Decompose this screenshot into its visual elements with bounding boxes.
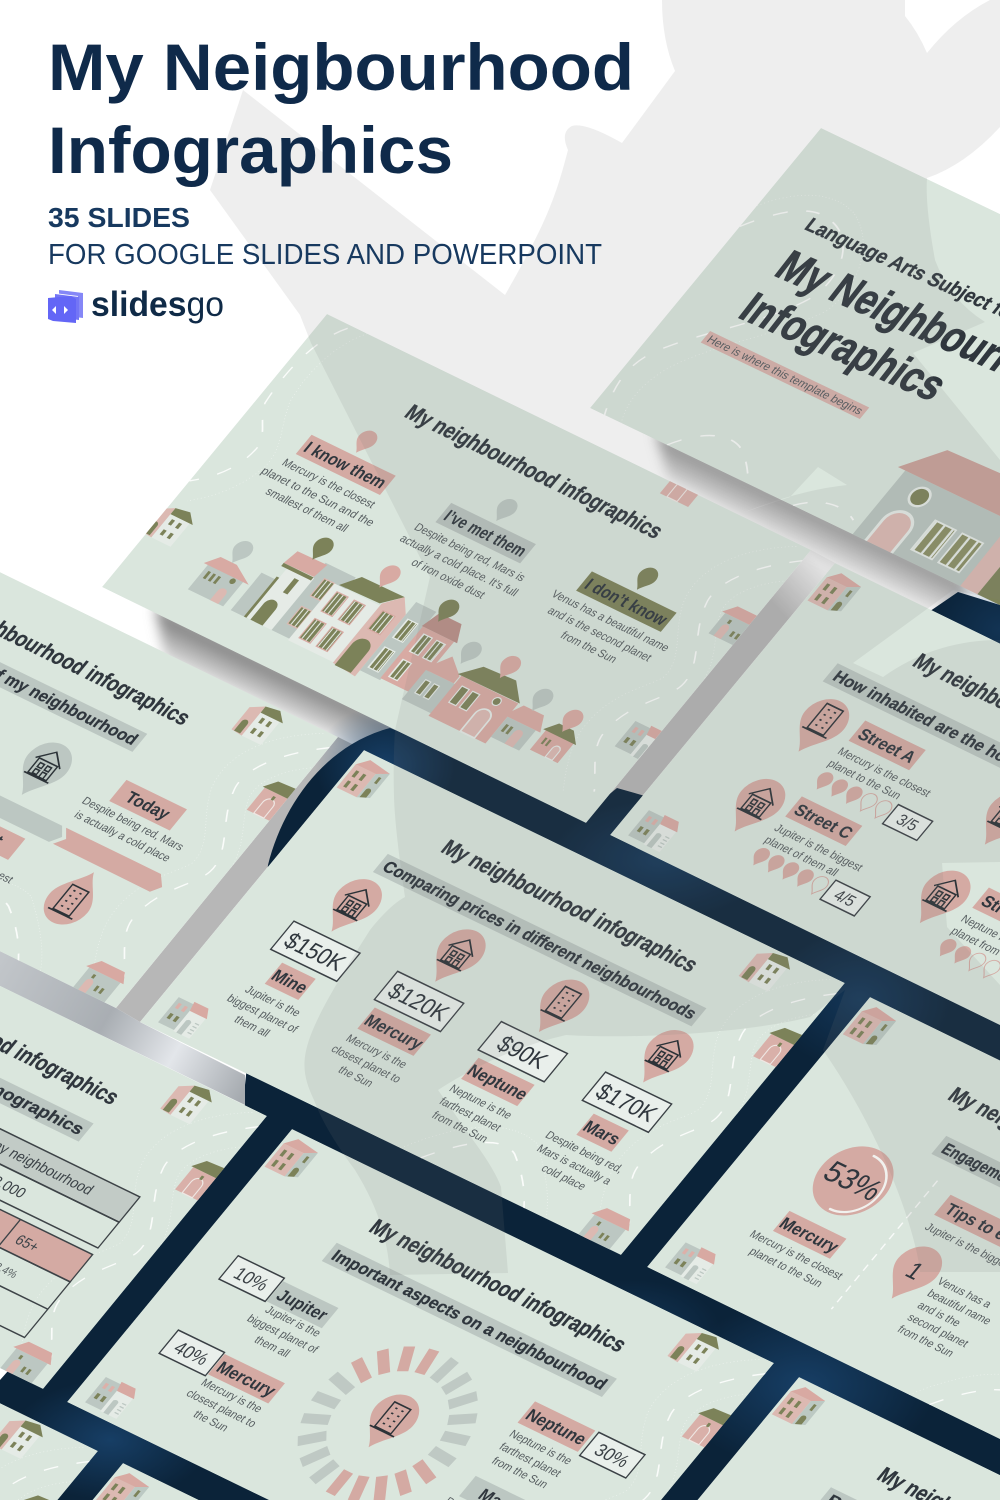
- column: I know them: Mercury is the closest: [279, 457, 378, 511]
- column: I've met them: actually a cold place. It’s full: [397, 533, 520, 599]
- label: Mercury: [736, 1204, 866, 1295]
- item: Mercury: the Sun: [335, 1064, 375, 1090]
- column: I don't know: and is the second planet: [545, 605, 655, 665]
- item: step 1: beautiful name: [924, 1288, 994, 1327]
- slide: bottom right: [576, 1377, 1000, 1500]
- item: Street A: planet to the Sun: [825, 758, 903, 802]
- item: Mine: Mine: [267, 966, 312, 997]
- item: Neptune: farthest planet: [496, 1441, 564, 1480]
- item: Neptune: from the Sun: [489, 1455, 550, 1491]
- subtitle bar: Important aspects on a neighbourhood: [327, 1247, 611, 1394]
- item: step 1: from the Sun: [895, 1324, 956, 1360]
- slide: I know them: [97, 291, 838, 828]
- item: Jupiter: 10%: [229, 1263, 274, 1295]
- item: Mine: biggest planet of: [224, 993, 301, 1036]
- stat: 53%: [796, 1135, 910, 1227]
- subtitle bar: [0, 1078, 94, 1142]
- column: I've met them: I’ve met them: [440, 507, 531, 561]
- item: Mine: [226, 879, 382, 1037]
- gradient band under left slide: [0, 951, 245, 1105]
- slide: comparing prices: [138, 750, 853, 1262]
- column: I don't know: [548, 568, 676, 663]
- item: Jupiter: Jupiter: [272, 1286, 332, 1325]
- item: Neptune: [484, 1401, 645, 1500]
- item: Mars: Mars is actually a: [534, 1143, 614, 1188]
- icon: stacked slides: [48, 290, 83, 323]
- road left: [190, 328, 367, 501]
- item: Today: Today: [121, 788, 175, 824]
- item: Neptune: Neptune is the: [446, 1083, 514, 1122]
- item: step 1: [853, 1239, 1000, 1363]
- item: Mercury: [130, 1330, 289, 1443]
- item: Mercury: the Sun: [190, 1409, 231, 1434]
- column: I've met them: of iron oxide dust: [408, 557, 488, 602]
- item: Mars: $170K: [590, 1078, 664, 1127]
- item: Jupiter: them all: [251, 1334, 292, 1360]
- item: Mars: [442, 1473, 542, 1500]
- item: Jupiter: Jupiter is the: [262, 1304, 323, 1340]
- column: I know them: [259, 430, 396, 532]
- title: My neighbourhood infographics: [400, 400, 669, 543]
- subheading: 35 SLIDES: [48, 202, 190, 233]
- item: Neptune: Neptune is the: [506, 1428, 574, 1467]
- item: step 1: and is the: [914, 1300, 963, 1329]
- item: Neptune: [432, 980, 590, 1143]
- slide: bottom left: [0, 1215, 107, 1500]
- column: I've met them: [400, 499, 536, 599]
- item: Mercury: closest planet to: [183, 1388, 259, 1430]
- item: Street C: planet of them all: [761, 835, 841, 879]
- item: Street C: 4/5: [830, 887, 860, 910]
- item: Mars: [536, 1030, 694, 1190]
- item: past label: [0, 826, 26, 884]
- subtitle bar: [822, 663, 1000, 768]
- item: Jupiter: biggest planet of: [244, 1313, 321, 1356]
- item: Mine: them all: [231, 1014, 272, 1040]
- item: Street A: 3/5: [892, 812, 922, 835]
- timeline arrows: [0, 796, 162, 892]
- street of houses: [188, 538, 584, 763]
- item: Street B: [984, 796, 1000, 844]
- heading: [48, 30, 634, 187]
- item: past pin: [22, 742, 72, 794]
- item: Today: is actually a cold place: [72, 809, 173, 865]
- column: I know them: I know them: [300, 438, 391, 492]
- item: Street A: Street A: [854, 725, 920, 767]
- slide: engagement: [647, 997, 1000, 1439]
- cover subtitle bar: Here is where this template begins: [704, 334, 865, 418]
- small houses: [140, 291, 838, 775]
- item: Neptune: $90K: [491, 1031, 554, 1074]
- item: Street C: Street C: [790, 801, 857, 843]
- item: step 1: 1: [899, 1258, 929, 1285]
- wordmark: slidesgo: [91, 285, 224, 324]
- stat: 53%: 53%: [816, 1156, 889, 1208]
- column: I don't know: Venus has a beautiful name: [548, 588, 672, 654]
- item: step 1: second planet: [905, 1312, 971, 1350]
- heading: My Neigbourhood: [48, 30, 634, 104]
- navy backdrop: [0, 570, 1000, 1500]
- title: My neighbourhood infographics: [436, 835, 704, 977]
- data table: 65+: [11, 1232, 42, 1256]
- item: Mine: Jupiter is the: [242, 984, 303, 1019]
- label: Mercury: Mercury is the closest: [747, 1229, 846, 1283]
- item: Neptune: Neptune: [463, 1061, 532, 1104]
- column: I don't know: I don’t know: [580, 575, 672, 629]
- item: Neptune: farthest planet: [436, 1096, 504, 1134]
- slide: how inhabited: [610, 563, 1000, 1076]
- item: Neptune: Neptune: [521, 1406, 591, 1449]
- item: Mercury: [332, 929, 486, 1087]
- item: Mars: cold place: [538, 1163, 588, 1193]
- gray band left of comparing slide: [116, 737, 364, 1022]
- logo: slidesgo: [48, 285, 224, 324]
- gray band between slides: [586, 550, 835, 835]
- item: Today: Despite being red, Mars: [79, 795, 186, 854]
- item: Street A: [798, 699, 934, 842]
- item: Today: [74, 780, 187, 862]
- item: Mercury: Mercury is the: [198, 1377, 265, 1415]
- heading: Infographics: [48, 113, 453, 187]
- shadow under cover slide: [655, 430, 965, 625]
- subtitle bar: [0, 662, 147, 752]
- item: Mercury: closest planet to: [328, 1043, 403, 1086]
- column: I don't know: from the Sun: [558, 630, 619, 666]
- item: Street C: [734, 778, 872, 917]
- subtitle bar: [816, 1487, 1000, 1500]
- item: Mercury: Mercury: [360, 1011, 428, 1053]
- item: Mercury: Mercury is the: [343, 1033, 409, 1071]
- subtitle bar: Comparing prices in different neighbourhoods: [378, 858, 700, 1023]
- column: I've met them: Despite being red, Mars is: [411, 522, 528, 584]
- subheading: [48, 202, 602, 271]
- item: Street C: Jupiter is the biggest: [771, 822, 866, 874]
- cover house illustration: [853, 450, 1000, 605]
- data table: [0, 1128, 141, 1338]
- label: Mercury: Mercury: [775, 1214, 843, 1257]
- title: My neighbourhood infographics: [364, 1214, 632, 1357]
- background silhouette overlay: [210, 0, 1000, 1275]
- slide: history: [0, 572, 338, 1008]
- item: Mercury: Mercury: [212, 1358, 280, 1401]
- item: Mercury: 40%: [169, 1337, 214, 1369]
- item: Neptune: 30%: [590, 1439, 634, 1471]
- label: Mercury: planet to the Sun: [746, 1246, 825, 1290]
- subheading: FOR GOOGLE SLIDES AND POWERPOINT: [48, 239, 602, 271]
- radial gauge: [261, 1321, 515, 1500]
- column: I know them: smallest of them all: [263, 486, 351, 535]
- item: Mine: $150K: [279, 927, 352, 976]
- item: Neptune: from the Sun: [429, 1110, 490, 1145]
- item: Mars: Mars: [579, 1117, 625, 1149]
- slide: cover: [590, 128, 1000, 605]
- item: Jupiter: [190, 1256, 351, 1369]
- item: step 1: Venus has a: [934, 1276, 994, 1311]
- item: Street A: Mercury is the closest: [835, 746, 934, 800]
- slide: important aspects: [67, 1129, 783, 1500]
- divider: [831, 1181, 938, 1309]
- column: I know them: planet to the Sun and the: [258, 465, 377, 529]
- cover title: Infographics: [730, 284, 957, 410]
- item: Street D: [920, 870, 1000, 978]
- shadow under neighbourhood slide: [155, 605, 590, 815]
- slide: bottom centre: [0, 1463, 616, 1500]
- icon: inverted pin: [44, 872, 94, 924]
- slide: demographics: [0, 986, 267, 1389]
- item: Mercury: $120K: [382, 978, 456, 1026]
- item: tips: [921, 1195, 1000, 1338]
- item: Mars: Despite being red,: [542, 1129, 626, 1176]
